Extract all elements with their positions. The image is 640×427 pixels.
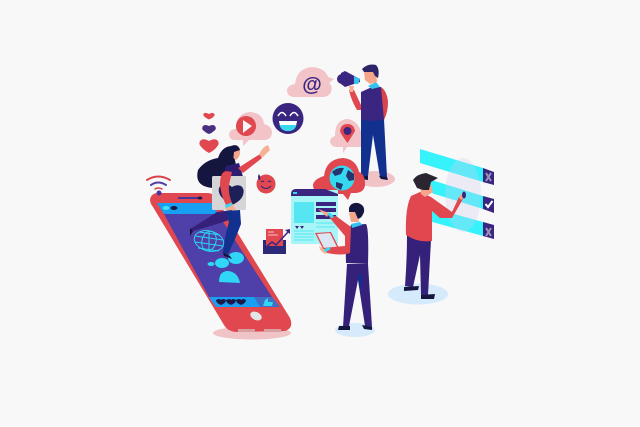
hearts on phone bar: [216, 299, 246, 305]
legs: [361, 119, 387, 177]
cloud: at sign: @: [302, 74, 322, 96]
legs: [190, 210, 232, 231]
globe on screen: [192, 227, 226, 255]
cloud: at sign: [287, 67, 334, 97]
cloud: location pin: [330, 119, 366, 153]
emoji: smiling red: [256, 174, 276, 194]
megaphone: [341, 71, 360, 87]
man with tablet: [315, 203, 375, 337]
emoji: laughing: [272, 103, 304, 134]
icon: thumbs up: [263, 298, 273, 306]
cloud: globe: [313, 158, 365, 200]
man at checklist: [388, 173, 466, 304]
hearts: [199, 113, 219, 153]
cloud: play icon: [229, 112, 272, 146]
man with megaphone: [337, 64, 395, 187]
card with heart: [212, 176, 246, 210]
checklist panel: [420, 149, 494, 239]
icon: wifi: [147, 176, 170, 196]
chat bubbles on screen: [208, 252, 244, 283]
web page panel: [291, 189, 338, 244]
head: [364, 72, 377, 84]
woman sitting on phone: [190, 145, 270, 259]
tablet: [315, 232, 339, 249]
icon: growth chart envelope: [263, 229, 290, 254]
phone with screen: [150, 193, 291, 340]
